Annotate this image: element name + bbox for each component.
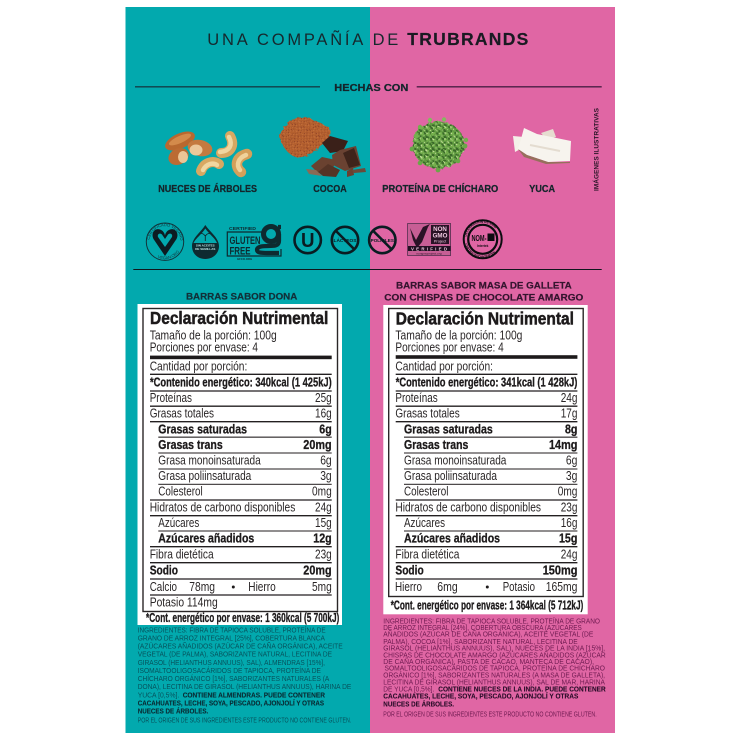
icon: chocolate pieces [306,136,366,177]
nutrient table: 25g [315,390,332,405]
icon: certified gluten free: CERTIFIED [229,226,256,231]
icon: NOM seal: CERTIFICADO INTERTEK [465,244,496,258]
footnote: energy per package: *Cont. energético por envase: 1 360kcal (5 700kJ) [146,610,339,625]
icon: certified gluten free: FREE [230,246,250,258]
nutrient table: 6g [320,452,332,468]
icon: no seed oil drop: SIN ACEITES [196,244,215,248]
icon: certified vegan [146,222,184,261]
ingredients text: masa de galleta: DE YUCA [0,5%]. [383,685,434,694]
serving information [150,327,277,355]
nutrient table: Azúcares añadidos [404,531,500,546]
ingredients text: dona: YUCA [0,5%]. [138,690,179,699]
ingredients text: masa de galleta [383,616,606,719]
label: nueces de árboles: NUECES DE ÁRBOLES [158,183,257,195]
icon: NOM seal [462,219,503,260]
ingredient: tree nuts [158,128,257,195]
ingredients text: dona [138,625,351,725]
nutrient table: 6mg [437,579,458,594]
ingredient: cassava [513,128,571,195]
separator [150,356,332,359]
serving information: Tamaño de la porción: 100g [150,327,277,342]
icon: peas [410,117,468,172]
nutrient table: 24g [315,499,332,514]
icon: certified vegan: CERTIFICADO VEGANO [147,224,183,240]
icon: kosher U: U [301,230,314,252]
ingredients text: masa de galleta: DE CAÑA ORGÁNICA), PASTA DE CACAO, MANTECA DE CACAO), [383,657,594,666]
icon: NOM seal: DECLARACIÓN DE NOM [465,221,496,236]
icon: no lactose: LÁCTEOS [334,237,357,244]
nutrient table: 23g [315,546,332,561]
ingredients text: masa de galleta: PALMA), COCOA [1%], SABORIZANTE NATURAL, LECITINA DE [383,637,578,646]
icon: non GMO verified [408,224,451,256]
nutrient table: Grasas trans [158,437,223,452]
nutrient table: 5mg [312,579,332,594]
ingredients text: masa de galleta: GIRASOL (HELIANTHUS ANNUUS), SAL), NUECES DE LA INDIA [15%], [383,644,605,653]
nutrient table: Grasas saturadas [158,421,247,436]
ingredients text: masa de galleta: DE ARROZ INTEGRAL [24%], COBERTURA OBSCURA (AZÚCARES [383,623,582,632]
nutrition heading: Declaración Nutrimental [150,308,328,328]
nutrient table: Cantidad por porción: [395,359,493,374]
background: pink half [370,7,615,733]
ingredients text: dona: GRANO DE ARROZ INTEGRAL [25%], COBERTURA BLANCA [138,633,325,642]
nutrient table: Hidratos de carbono disponibles [395,499,541,514]
icon: certified gluten free [227,226,281,261]
ingredients text: dona: CHÍCHARO ORGÁNICO [1%], SABORIZANTES NATURALES (A [138,674,329,683]
ingredient: cocoa [279,117,366,195]
heading: barras sabor dona: BARRAS SABOR DONA [186,291,298,301]
nutrient table [150,359,332,610]
nutrient table: 15g [559,531,577,546]
nutrient table: 17g [561,406,577,421]
nutrient table: 78mg [189,579,215,594]
title: TRUBRANDS [407,29,528,49]
nutrient table: Potasio 114mg [150,595,218,610]
nutrient table: Grasa monoinsaturada [158,452,261,468]
icon: no seed oil drop [192,225,219,259]
nutrient table: Azúcares añadidos [158,531,254,546]
nutrient table: Azúcares [158,515,200,530]
nutrient table: 14mg [549,437,577,452]
icon: non GMO verified: Project [434,238,447,244]
icon: non GMO verified: GMO [433,232,448,240]
nutrient table: Colesterol [158,484,203,499]
ingredients text: masa de galleta: INGREDIENTES: FIBRA DE TAPIOCA SOLUBLE, PROTEÍNA DE GRANO [383,616,600,625]
nutrient table: 24g [561,546,577,561]
nutrient table: Fibra dietética [150,546,214,561]
nutrient table: Sodio [150,563,178,578]
ingredient: pea protein [382,117,499,195]
nutrient table: 0mg [558,484,577,499]
icon: cocoa powder [279,117,330,158]
title [207,29,528,49]
heading: barras sabor masa de galleta [384,280,583,303]
serving information: Tamaño de la porción: 100g [395,327,522,342]
nutrient table: 16g [561,515,577,530]
ingredients text: dona: ISOMALTOOLIGOSACÁRIDOS DE TAPIOCA, PROTEÍNA DE [138,666,321,675]
nutrient table: 15g [315,515,332,530]
note: imágenes ilustrativas: IMÁGENES ILUSTRATIVAS [592,107,600,191]
icon: no polyols [369,227,395,253]
icon: almonds [162,128,214,168]
nutrient table: Proteínas [150,390,192,405]
nutrient table: 20mg [303,437,332,452]
nutrient table: 165mg [546,579,577,594]
icon: no seed oil drop: DE SEMILLAS [195,247,215,251]
icon: kosher U [294,227,321,253]
nutrient table: Grasas totales [150,406,214,421]
nutrient table: Azúcares [404,515,445,530]
serving information: Porciones por envase: 4 [395,340,504,355]
nutrient table: Hierro [248,579,276,594]
nutrient table: *Contenido energético: 341kcal (1 428kJ) [396,375,577,390]
nutrient table: 150mg [543,563,577,578]
nutrient table: Proteínas [395,390,438,405]
nutrient table: Colesterol [404,484,448,499]
nutrient table: Grasa poliinsaturada [404,468,498,483]
nutrition heading: Declaración Nutrimental [396,308,574,328]
nutrient table: Hidratos de carbono disponibles [150,499,296,514]
label: proteína de chícharo: PROTEÍNA DE CHÍCHARO [382,183,499,195]
ingredients text: masa de galleta: ORGÁNICO [1%], SABORIZANTES NATURALES (A MASA DE GALLETA), [383,671,605,680]
nutrient table: Grasas totales [395,406,460,421]
nutrient table: Calcio [150,579,177,594]
ingredients text: masa de galleta: LECITINA DE GIRASOL (HELIANTHUS ANNUUS), SAL DE MAR, HARINA [383,677,605,686]
icon: certified gluten free: GLUTEN [230,235,261,247]
serving information [395,327,522,355]
nutrient table: 3g [320,468,332,483]
nutrient table: Grasa poliinsaturada [158,468,252,483]
ingredients text: masa de galleta: POR EL ORIGEN DE SUS INGREDIENTES ESTE PRODUCTO NO CONTIENE GLUTEN. [383,710,597,719]
icon: certified vegan: VEGAN.ORG [158,250,179,260]
nutrient table: 6g [566,452,577,468]
ingredients text: dona: (AZÚCARES AÑADIDOS (AZÚCAR DE CAÑA ORGÁNICA), ACEITE [138,642,343,650]
nutrient table: Hierro [395,579,422,594]
separator [396,355,577,359]
icon: NOM seal: Intertek [477,244,489,248]
nutrient table: Grasas saturadas [404,421,493,436]
heading: hechas con: HECHAS CON [334,82,408,94]
heading: barras sabor masa de galleta: BARRAS SABOR MASA DE GALLETA [396,280,572,290]
ingredients text: masa de galleta: AÑADIDOS (AZÚCAR DE CAÑA ORGÁNICA), ACEITE VEGETAL (DE [383,630,593,639]
nutrient table: Fibra dietética [395,546,460,561]
icon: NOM seal: NOM- [472,233,487,243]
icon: non GMO verified: NON [433,226,447,233]
ingredients text: dona: CONTIENE ALMENDRAS. PUEDE CONTENER [183,690,326,699]
nutrient table: Cantidad por porción: [150,359,247,374]
icon: certified gluten free: GFCO.ORG [237,257,252,261]
icon: non GMO verified: VERIFIED [411,246,447,251]
nutrient table [395,359,577,594]
nutrient table: 6g [319,421,332,436]
ingredients text: dona: GIRASOL (HELIANTHUS ANNUUS), SAL), ALMENDRAS [15%], [138,658,325,667]
nutrient table: 16g [315,406,332,421]
icon: cassava pieces [513,128,571,164]
nutrient table: Grasas trans [404,437,468,452]
nutrient table: 20mg [303,563,332,578]
ingredients text: dona: INGREDIENTES: FIBRA DE TAPIOCA SOLUBLE, PROTEÍNA DE [138,625,326,634]
ingredients text: masa de galleta: CHISPAS DE CHOCOLATE AMARGO (AZÚCARES AÑADIDOS (AZÚCAR [383,650,606,659]
nutrient table: 3g [566,468,577,483]
ingredients text: masa de galleta: SOMALTOOLIGOSACÁRIDOS DE TAPIOCA, PROTEÍNA DE CHÍCHARO [384,664,605,673]
ingredients text: dona: NUECES DE ÁRBOLES. [138,706,208,716]
panel: nutrition facts, dona [138,304,342,625]
nutrient table: 12g [313,531,332,546]
divider [133,268,602,270]
nutrient table: 0mg [312,484,332,499]
panel: nutrition facts, masa de galleta [383,305,588,614]
ingredients text: dona: POR EL ORIGEN DE SUS INGREDIENTES ESTE PRODUCTO NO CONTIENE GLUTEN. [138,716,351,725]
serving information: Porciones por envase: 4 [150,340,258,355]
background: teal half [126,7,370,733]
icon: non GMO verified: nongmoproject.org [416,252,442,256]
ingredients text: masa de galleta: CONTIENE NUECES DE LA INDIA. PUEDE CONTENER [438,685,606,694]
ingredients text: masa de galleta: CACAHUATES, LECHE, SOYA, PESCADO, AJONJOLÍ Y OTRAS [383,692,578,701]
nutrient table: Grasa monoinsaturada [404,452,507,468]
footnote: energy per package: *Cont. energético por envase: 1 364kcal (5 712kJ) [391,597,583,612]
ingredients text: dona: VEGETAL (DE PALMA), SABORIZANTE NATURAL, LECITINA DE [138,650,332,659]
label: cocoa: COCOA [313,184,347,195]
nutrient table: *Contenido energético: 340kcal (1 425kJ) [150,375,332,390]
ingredients text: dona: DONA), LECITINA DE GIRASOL (HELIANTHUS ANNUUS), HARINA DE [138,682,351,691]
nutrient table: 24g [561,390,577,405]
ingredients text: masa de galleta: NUECES DE ÁRBOLES. [383,700,454,709]
nutrient table: Sodio [395,563,424,578]
icon: no lactose [332,227,358,253]
ingredients text: dona: CACAHUATES, LECHE, SOYA, PESCADO, AJONJOLÍ Y OTRAS [138,698,324,707]
nutrient table: 23g [561,499,577,514]
label: yuca: YUCA [529,184,555,195]
heading: barras sabor masa de galleta: CON CHISPAS DE CHOCOLATE AMARGO [384,293,583,303]
icon: cashews [201,136,247,172]
title: UNA COMPAÑÍA DE [207,29,398,49]
icon: no polyols: POLIOLES [371,238,394,243]
nutrient table: 8g [565,421,577,436]
nutrient table: Potasio [503,579,535,594]
